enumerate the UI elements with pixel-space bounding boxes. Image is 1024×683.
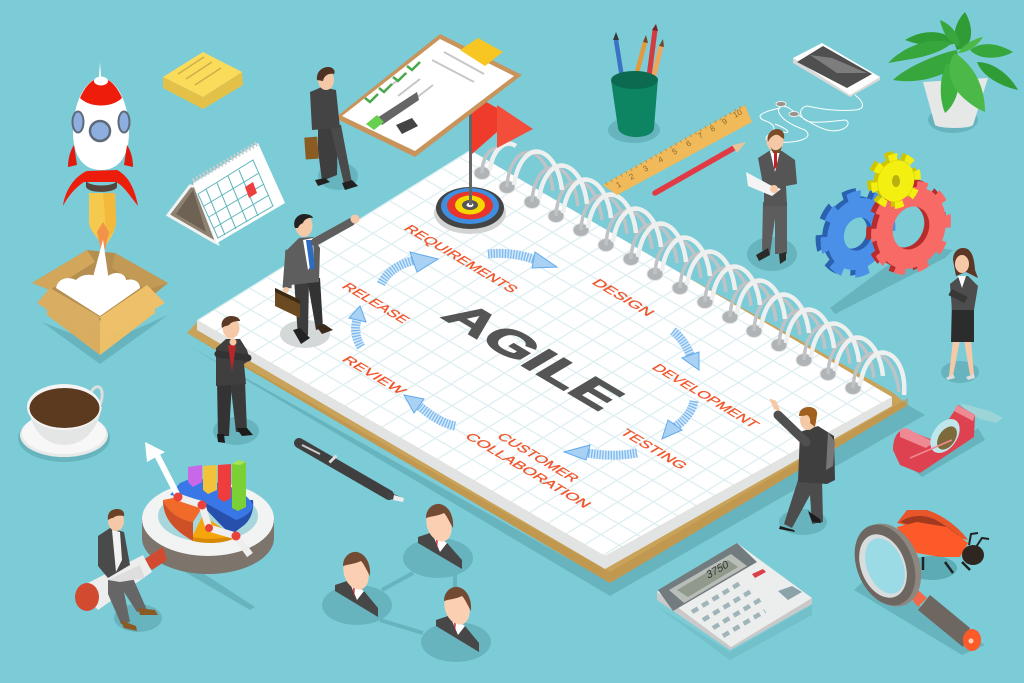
- icon: tape dispenser: [893, 403, 1003, 477]
- icon: ruler: 6: [684, 138, 693, 149]
- label: release: RELEASE: [338, 281, 413, 325]
- person: with laptop top right: [746, 129, 797, 271]
- icon: earphones: [760, 95, 863, 142]
- spiral binding: [474, 144, 904, 395]
- heading: AGILE: AGILE: [431, 296, 636, 417]
- icon: ruler: 10: [732, 107, 744, 120]
- label: testing: TESTING: [616, 427, 691, 471]
- icon: coffee cup: [18, 384, 110, 462]
- icon: ruler: [603, 105, 752, 195]
- label: collaboration: COLLABORATION: [461, 431, 595, 510]
- icon: pencil cup: [608, 24, 664, 143]
- person: sitting with laptop: [98, 509, 162, 632]
- label: customer: CUSTOMER: [493, 431, 583, 484]
- notebook: [187, 150, 925, 596]
- icon: gears: [808, 148, 960, 314]
- label: design: DESIGN: [588, 277, 658, 318]
- label: requirements: REQUIREMENTS: [400, 223, 522, 295]
- icon: ruler: 8: [708, 123, 717, 134]
- icon: red pencil: [655, 142, 746, 193]
- icon: potted plant: [888, 12, 1018, 133]
- avatar: top: [418, 504, 462, 569]
- cycle arrows: [349, 252, 699, 460]
- icon: ruler: 2: [628, 171, 636, 182]
- icon: bug under magnifier: [897, 510, 989, 580]
- icon: clipboard with checklist: [335, 34, 522, 157]
- icon: calculator: 3750: [705, 558, 730, 582]
- person: center with briefcase: [275, 214, 360, 348]
- icon: sticky note: [163, 52, 243, 109]
- icon: ruler: 4: [656, 154, 665, 165]
- label: development: DEVELOPMENT: [648, 362, 763, 430]
- icon: rocket: [63, 62, 138, 288]
- person: thinking, left: [213, 316, 259, 445]
- icon: ruler: 7: [696, 130, 705, 141]
- avatar: bottom: [436, 587, 479, 652]
- person: top with briefcase: [304, 67, 358, 190]
- chart magnifier: [75, 442, 274, 611]
- label: review: REVIEW: [338, 354, 410, 396]
- person: pointing, seen from behind: [772, 401, 835, 535]
- icon: ruler: 5: [670, 146, 679, 157]
- team network: [322, 504, 491, 662]
- icon: magnifying glass: [843, 514, 985, 655]
- icon: calculator: [655, 543, 812, 660]
- icon: ruler: 9: [720, 116, 729, 127]
- icon: cardboard box: [32, 240, 168, 364]
- icon: ruler: 3: [642, 163, 650, 174]
- avatar: left: [335, 552, 378, 617]
- person: woman right: [941, 248, 979, 383]
- icon: smartphone: [793, 43, 880, 97]
- icon: ruler: 1: [614, 179, 623, 190]
- icon: desk calendar: [168, 143, 285, 243]
- icon: pen: [299, 443, 404, 502]
- flag and target: [434, 83, 533, 234]
